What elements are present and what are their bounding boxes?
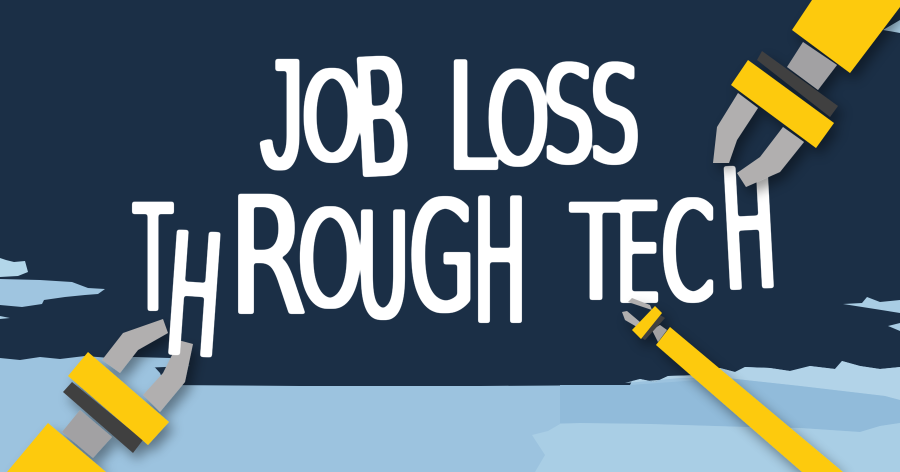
small dab, right (888, 323, 900, 331)
left arm upper claw (102, 319, 168, 373)
small arm long yellow shaft (656, 327, 843, 472)
small brush dab, left (0, 258, 28, 277)
line two: THROUGH TECH: H (717, 130, 780, 331)
line two: THROUGH TECH: U (357, 181, 409, 354)
lighter strip, upper right (625, 361, 900, 400)
left arm lower claw (143, 340, 193, 412)
small arm neck (652, 325, 667, 342)
top arm yellow base (792, 0, 900, 73)
top arm yellow collar (731, 60, 834, 148)
line two: THROUGH TECH: T (571, 176, 621, 333)
small arm dark collar (642, 315, 665, 340)
line two: THROUGH TECH (134, 130, 780, 398)
left arm yellow collar (68, 352, 169, 445)
line two: THROUGH TECH: C (661, 171, 715, 334)
left arm yellow base (7, 423, 106, 472)
line two: THROUGH TECH: H (474, 161, 526, 365)
left arm neck (62, 410, 112, 458)
line one: JOB LOSS: S (590, 38, 640, 196)
line one: JOB LOSS: B (350, 22, 414, 217)
small arm lower claw (622, 311, 640, 327)
line two: THROUGH TECH: G (409, 168, 475, 348)
left arm dark collar (63, 382, 143, 453)
top arm neck (787, 42, 837, 90)
lighter band, bottom right (532, 423, 900, 472)
small arm yellow collar (632, 306, 662, 339)
line one: JOB LOSS: O (302, 44, 362, 191)
line two: THROUGH TECH: T (134, 172, 172, 346)
line one: JOB LOSS: L (448, 30, 496, 207)
brush stroke, top right (883, 20, 900, 33)
small dab below left stroke (0, 316, 10, 319)
small arm upper claw (628, 298, 652, 310)
top arm left claw (713, 93, 758, 163)
line one: JOB LOSS: O (487, 46, 549, 196)
top arm dark collar (757, 51, 838, 117)
robot arm: bottom left (7, 319, 193, 472)
line two: THROUGH TECH: H (161, 195, 227, 398)
line two: THROUGH TECH: E (616, 172, 660, 337)
title (134, 22, 780, 398)
top arm right claw (737, 127, 804, 187)
line one: JOB LOSS: S (544, 37, 594, 196)
line two: THROUGH TECH: R (230, 162, 306, 354)
left brush stroke (0, 279, 105, 307)
line two: THROUGH TECH: O (298, 182, 362, 340)
robot arm: top right (713, 0, 900, 187)
darker band, right (560, 378, 900, 432)
line one: JOB LOSS (261, 22, 640, 217)
line one: JOB LOSS: J (261, 25, 303, 204)
right brush stroke (843, 297, 900, 313)
robot arm: bottom right (622, 298, 843, 472)
